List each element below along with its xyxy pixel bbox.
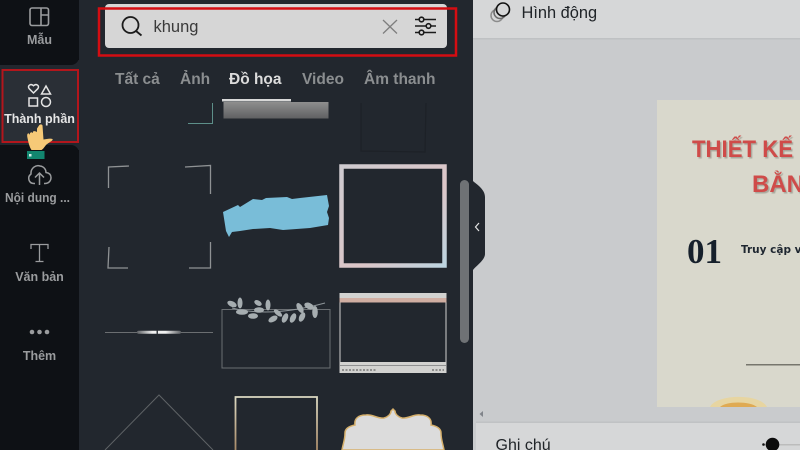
toolbar label: Hình động bbox=[522, 4, 597, 22]
category tabs: Âm thanh bbox=[364, 70, 435, 88]
sidebar item: Thành phần (selected): Thành phần bbox=[4, 112, 75, 126]
sidebar item: Thêm bbox=[23, 330, 56, 363]
sidebar item: Văn bản bbox=[15, 244, 64, 284]
graphic: gold square frame bbox=[236, 397, 317, 450]
icon: scroll left bbox=[480, 411, 483, 417]
sidebar item: Mẫu bbox=[27, 8, 52, 47]
panel: graphics panel background bbox=[79, 0, 475, 450]
panel collapse handle bbox=[473, 181, 485, 270]
graphic: partial corner frame bbox=[188, 103, 212, 124]
graphic: corner brackets frame bbox=[108, 166, 210, 268]
slide heading bbox=[692, 135, 800, 198]
slide heading: THIẾT KẾ bbox=[692, 135, 793, 163]
category tabs: Tất cả bbox=[115, 71, 160, 88]
graphic: faint dark frame bbox=[361, 103, 426, 152]
icon: filter sliders bbox=[415, 17, 436, 35]
zoom slider bbox=[762, 438, 800, 450]
step number: 01 bbox=[687, 232, 722, 271]
sidebar item: Nội dung: Nội dung ... bbox=[5, 191, 70, 205]
sidebar item: Văn bản: Văn bản bbox=[15, 270, 64, 284]
category tabs: Video bbox=[302, 71, 344, 88]
icon: clear search bbox=[383, 20, 397, 34]
active tab underline bbox=[222, 99, 291, 102]
yellow decoration bbox=[710, 397, 767, 407]
sidebar item: Nội dung bbox=[5, 166, 70, 205]
search bar bbox=[99, 4, 456, 56]
graphic: ornate label shape bbox=[342, 409, 444, 450]
graphic: window style frame bbox=[340, 293, 446, 373]
sidebar item: Mẫu: Mẫu bbox=[27, 32, 52, 47]
category tabs: Đồ họa bbox=[229, 71, 282, 88]
icon: animation circles bbox=[491, 3, 510, 22]
search query text: khung bbox=[154, 18, 198, 36]
panel: left sidebar bbox=[0, 0, 79, 450]
graphic: gradient bar bbox=[224, 102, 328, 118]
panel scrollbar bbox=[460, 180, 469, 343]
category tabs bbox=[115, 70, 435, 88]
slide page bbox=[657, 100, 800, 407]
sidebar item: Thêm: Thêm bbox=[23, 349, 56, 363]
graphic: blue brush stroke bbox=[223, 195, 329, 237]
top toolbar bbox=[473, 0, 800, 40]
icon: pointing hand bbox=[27, 124, 53, 159]
bottom notes bar bbox=[476, 422, 800, 450]
tiny caption line bbox=[746, 364, 800, 366]
category tabs: Ảnh bbox=[180, 71, 210, 88]
graphic: ornamental divider bbox=[105, 330, 213, 334]
graphic: pastel square frame bbox=[342, 166, 444, 266]
sidebar item: Thành phần (selected) bbox=[2, 70, 78, 142]
icon: magnifier bbox=[122, 17, 142, 36]
graphic: leaf frame bbox=[222, 298, 330, 368]
panel: canvas workspace bbox=[473, 0, 800, 450]
graphic: thin diamond frame bbox=[105, 395, 213, 450]
